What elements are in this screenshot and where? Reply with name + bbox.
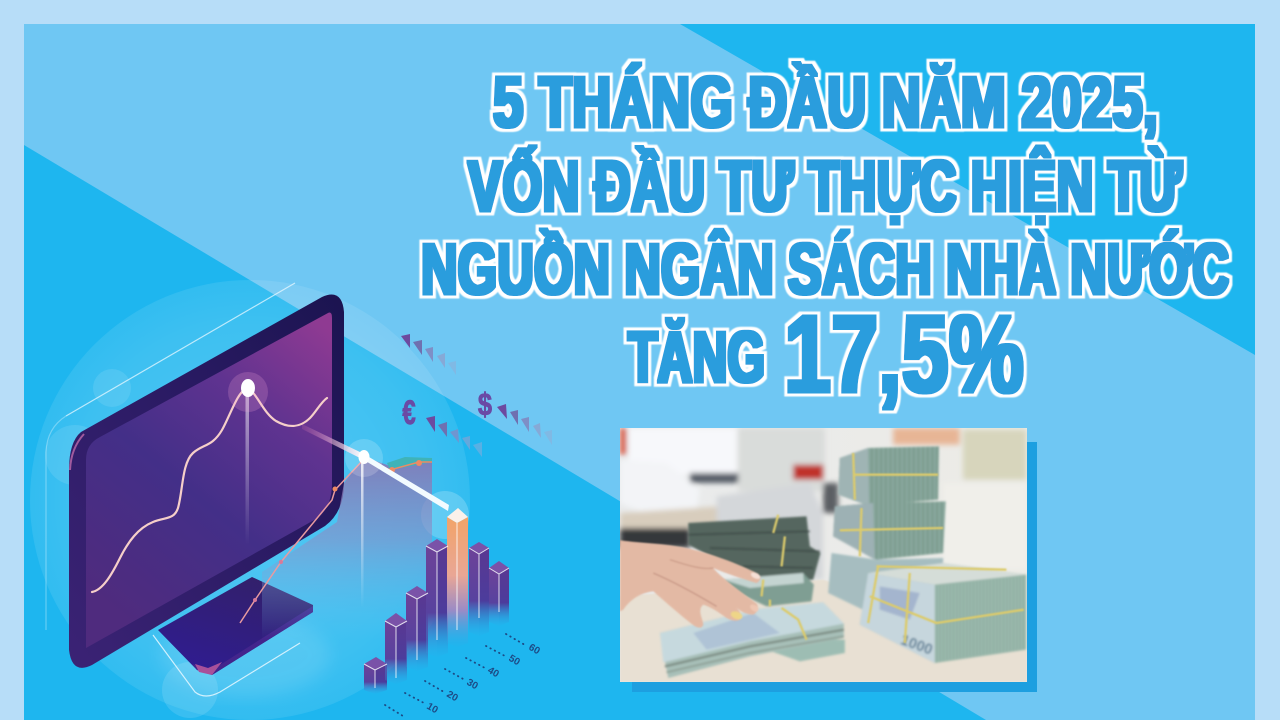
illustration: monitor <box>69 295 344 668</box>
bar 6 <box>469 542 489 636</box>
icon: arrow row <box>401 334 456 375</box>
photo: hands counting banknote stacks <box>620 428 1027 682</box>
title line 4: TĂNG <box>628 318 765 398</box>
title <box>421 62 1229 416</box>
peak node <box>241 379 255 397</box>
photo hand <box>620 540 761 628</box>
photo shadow <box>632 442 1037 692</box>
photo table <box>620 580 1027 682</box>
icon: euro sign with arrows: € <box>402 394 416 432</box>
bar chart <box>364 508 509 694</box>
bar 5 highlighted <box>447 508 468 647</box>
illustration: light beams and node <box>240 424 449 623</box>
monitor screen with gradient <box>86 313 332 648</box>
icon: dollar sign with arrows: $ <box>478 388 492 423</box>
photo background, blurred <box>620 428 1027 580</box>
photo banknote stacks <box>660 446 1026 678</box>
chart axis labels: 50 <box>506 653 522 668</box>
screen trend line <box>92 389 327 592</box>
chart axis labels: 40 <box>486 665 501 680</box>
peak vertical light <box>246 395 249 545</box>
photo rubber bands <box>762 453 1024 643</box>
bar highlights <box>364 523 509 688</box>
peak node glow <box>228 372 268 412</box>
icon: euro sign with arrows <box>402 394 482 457</box>
chart axis labels: 30 <box>464 677 480 692</box>
chart axis labels: 60 <box>526 642 542 657</box>
bar 7 <box>489 561 509 626</box>
bar 4 <box>426 539 448 657</box>
monitor frame <box>69 295 344 668</box>
illustration: glow circles behind monitor <box>30 280 470 720</box>
bar 2 <box>385 613 407 684</box>
chart axis labels: 20 <box>444 689 460 704</box>
illustration: monitor stand <box>158 577 313 675</box>
bar 1 <box>364 657 387 694</box>
chart axis labels <box>385 634 542 716</box>
bar 3 <box>406 586 428 671</box>
chart axis labels: 10 <box>424 701 440 716</box>
highlighted figure: 17,5% <box>784 293 1024 416</box>
icon: dollar sign with arrows <box>478 388 552 445</box>
illustration: translucent chart panel <box>262 457 432 640</box>
frame highlight <box>70 434 84 470</box>
illustration: glowing hexagon outline <box>46 283 300 696</box>
photo banknote stacks: 1000 <box>898 632 935 659</box>
